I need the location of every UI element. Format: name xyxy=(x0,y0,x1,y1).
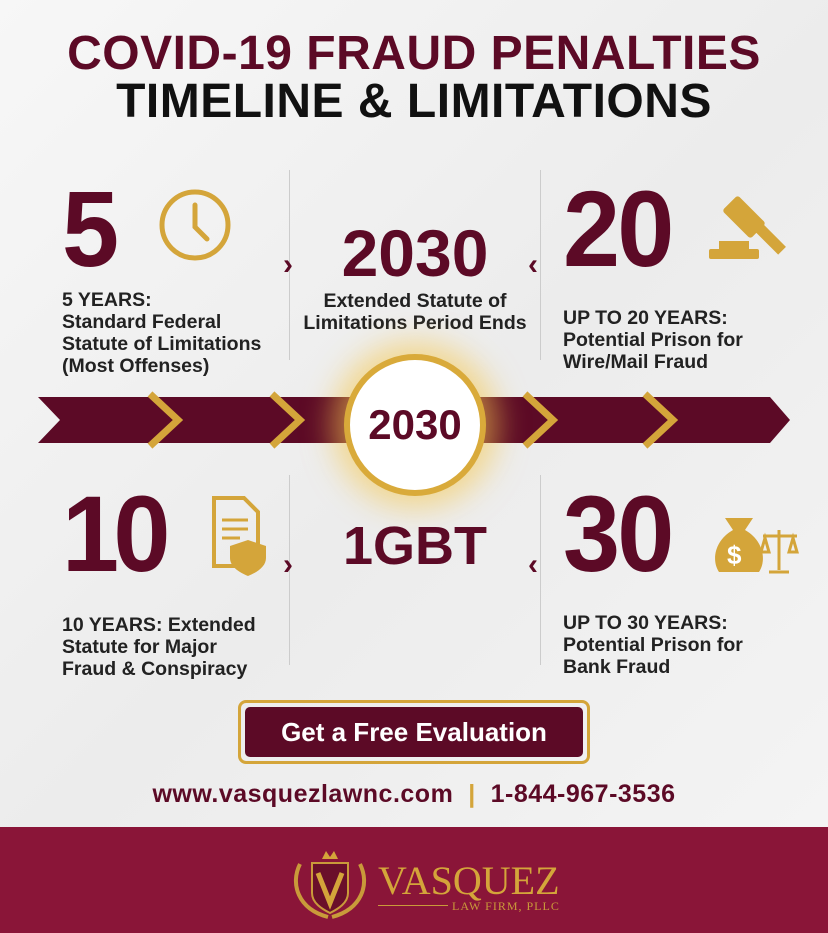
panel: 5 years: 5 YEARS: xyxy=(62,289,152,311)
panel: 20 years: 20 xyxy=(563,168,671,289)
panel: 10 years: 10 YEARS: Extended xyxy=(62,614,256,636)
logo: LAW FIRM, PLLC xyxy=(452,899,560,913)
panel: 2030 top: 2030 xyxy=(342,216,488,290)
panel: 20 years: Potential Prison for xyxy=(563,329,743,351)
panel: 5 years xyxy=(62,168,261,377)
icon: document shield xyxy=(212,496,266,576)
panel: 2030 top xyxy=(303,216,527,334)
panel: 2030 top: Limitations Period Ends xyxy=(303,312,527,334)
panel: 5 years: Statute of Limitations xyxy=(62,333,261,355)
text: ‹ xyxy=(528,248,538,281)
text: › xyxy=(283,548,293,581)
panel: 10 years: Statute for Major xyxy=(62,636,217,658)
button: free evaluation: Get a Free Evaluation xyxy=(281,717,547,747)
title xyxy=(67,27,761,128)
panel: 30 years: 30 xyxy=(563,473,671,594)
panel: 30 years: Bank Fraud xyxy=(563,656,670,678)
panel: 5 years: Standard Federal xyxy=(62,311,221,333)
logo xyxy=(294,851,560,919)
panel: 30 years: Potential Prison for xyxy=(563,634,743,656)
footer xyxy=(0,827,828,933)
panel: 2030 top: Extended Statute of xyxy=(323,290,507,312)
center circle 2030: 2030 xyxy=(368,401,462,448)
button: free evaluation xyxy=(238,700,590,764)
panel: 10 years: 10 xyxy=(62,473,165,594)
text: 1GBT: 1GBT xyxy=(343,516,487,576)
title: COVID-19 FRAUD PENALTIES xyxy=(67,27,761,80)
contact line: www.vasquezlawnc.com | 1-844-967-3536 xyxy=(152,780,676,808)
title: TIMELINE & LIMITATIONS xyxy=(116,75,712,128)
panel: 20 years xyxy=(563,168,786,373)
panel: 20 years: UP TO 20 YEARS: xyxy=(563,307,728,329)
icon: money bag and scales xyxy=(715,518,799,574)
arrow timeline xyxy=(38,391,790,449)
center circle 2030 xyxy=(344,354,486,496)
icon: clock xyxy=(160,190,230,260)
logo: VASQUEZ xyxy=(378,858,560,903)
panel: 20 years: Wire/Mail Fraud xyxy=(563,351,708,373)
icon: money bag and scales: $ xyxy=(727,540,742,570)
text: ‹ xyxy=(528,548,538,581)
panel: 30 years xyxy=(563,473,799,678)
panel: 5 years: 5 xyxy=(62,168,116,289)
icon: gavel xyxy=(709,196,786,259)
text: › xyxy=(283,248,293,281)
panel: 5 years: (Most Offenses) xyxy=(62,355,209,377)
panel: 10 years: Fraud & Conspiracy xyxy=(62,658,247,680)
panel: 30 years: UP TO 30 YEARS: xyxy=(563,612,728,634)
panel: 10 years xyxy=(62,473,266,680)
